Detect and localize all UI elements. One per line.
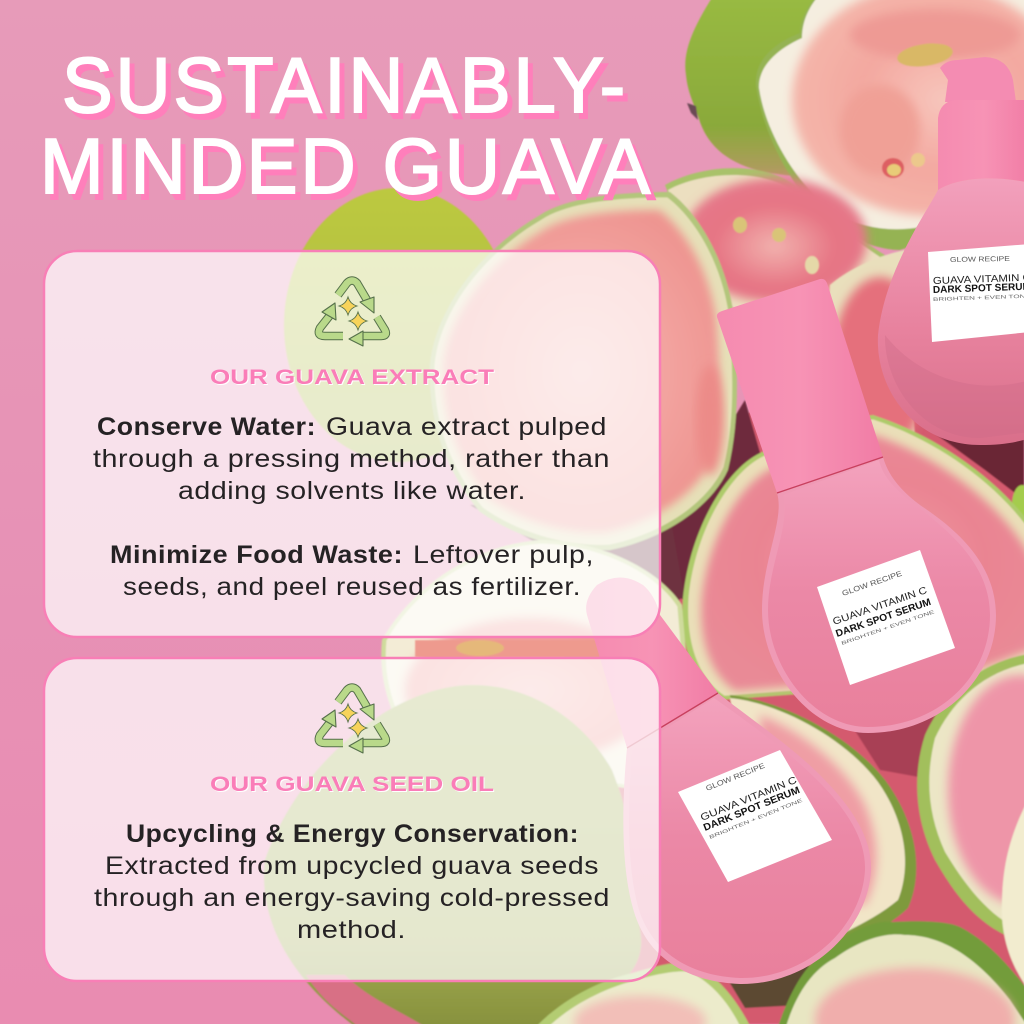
panel: our guava seed oil — [44, 658, 660, 981]
panel background — [44, 251, 660, 637]
bottle label — [817, 550, 955, 685]
fruit: cut guava top right — [756, 0, 1024, 250]
heading: our guava seed oil: OUR GUAVA SEED OIL — [210, 773, 494, 796]
bottle label: GLOW RECIPE — [950, 256, 1010, 264]
bottle body — [623, 693, 871, 984]
text: minimize food waste: Leftover pulp, — [413, 541, 594, 569]
text: conserve water: Guava extract pulped — [326, 413, 607, 441]
title line 1: SUSTAINABLY- — [62, 41, 628, 129]
fruit: cut guava bottom right — [777, 921, 1024, 1024]
photo: guava pile — [264, 0, 1024, 1024]
bottle label: GUAVA VITAMIN C — [933, 273, 1024, 287]
fruit: large half guava — [430, 192, 737, 550]
bottle label: DARK SPOT SERUM — [702, 785, 802, 834]
collar line — [777, 457, 883, 493]
bottle label: GLOW RECIPE — [704, 761, 766, 793]
product: bottle top right — [878, 57, 1024, 445]
fruit: whole lime guava — [284, 188, 512, 462]
text: minimize food waste — [110, 541, 594, 601]
text: conserve water: Conserve Water: — [97, 413, 316, 441]
text: minimize food waste: Minimize Food Waste: — [110, 541, 403, 569]
fruit: sliver right edge — [1002, 796, 1024, 992]
heading: our guava extract: OUR GUAVA EXTRACT — [210, 366, 494, 389]
fruit: cut guava centre — [381, 540, 690, 790]
bottle label: GUAVA VITAMIN C — [699, 775, 799, 824]
product: bottle centre — [717, 279, 996, 733]
text: upcycling and energy conservation: Extracted from upcycled guava seeds — [105, 852, 599, 880]
title — [40, 41, 658, 216]
icon: recycling arrows with sparkles — [319, 688, 386, 753]
text: conserve water: adding solvents like water. — [178, 477, 526, 505]
text: upcycling and energy conservation: Upcycling & Energy Conservation: — [126, 820, 579, 848]
fruit: large whole guava bottom — [264, 685, 641, 1024]
fruit: cut guava bottom — [533, 962, 752, 1024]
fruit: right cut guava slice — [830, 250, 928, 453]
heading: our guava extract: OUR GUAVA EXTRACT — [211, 367, 495, 390]
text: minimize food waste: seeds, and peel reused as fertilizer. — [123, 573, 581, 601]
bottle label: BRIGHTEN + EVEN TONE — [841, 609, 936, 647]
panel: our guava extract — [44, 251, 660, 637]
fruit: whole green guava top — [685, 0, 830, 176]
bottle cap — [586, 578, 718, 748]
text: upcycling and energy conservation: method. — [297, 916, 406, 944]
fruit: cut guava behind — [665, 168, 885, 310]
shadow: gaps between fruit — [470, 360, 1024, 1024]
fruit: cut guava right edge — [917, 652, 1024, 940]
bottle body — [762, 457, 996, 733]
heading: our guava seed oil: OUR GUAVA SEED OIL — [211, 774, 495, 797]
title line 2 shadow: MINDED GUAVA — [45, 128, 658, 216]
bottle label: DARK SPOT SERUM — [834, 597, 933, 640]
bottle label: GUAVA VITAMIN C — [831, 585, 929, 628]
bottle label: GLOW RECIPE — [841, 569, 903, 598]
bottle label — [928, 244, 1024, 342]
icon: recycling arrows with sparkles — [319, 280, 386, 346]
bottle body — [878, 178, 1024, 445]
bottle label: BRIGHTEN + EVEN TONE — [933, 294, 1024, 303]
fruit: cut guava beneath bottle — [730, 695, 916, 945]
fruit: large cut guava right — [682, 415, 1024, 700]
panel background — [44, 658, 660, 981]
bottle label: BRIGHTEN + EVEN TONE — [709, 797, 804, 841]
bottle cap — [717, 279, 883, 493]
collar line — [627, 693, 718, 748]
title line 1 shadow: SUSTAINABLY- — [67, 47, 633, 135]
bottle label — [678, 750, 832, 882]
bottle cap — [938, 57, 1024, 190]
text: upcycling and energy conservation — [94, 820, 610, 944]
title line 2: MINDED GUAVA — [40, 122, 653, 210]
text: conserve water: through a pressing method, rather than — [93, 445, 610, 473]
product: bottle bottom — [586, 578, 871, 984]
text: conserve water — [93, 413, 610, 505]
text: upcycling and energy conservation: through an energy-saving cold-pressed — [94, 884, 610, 912]
